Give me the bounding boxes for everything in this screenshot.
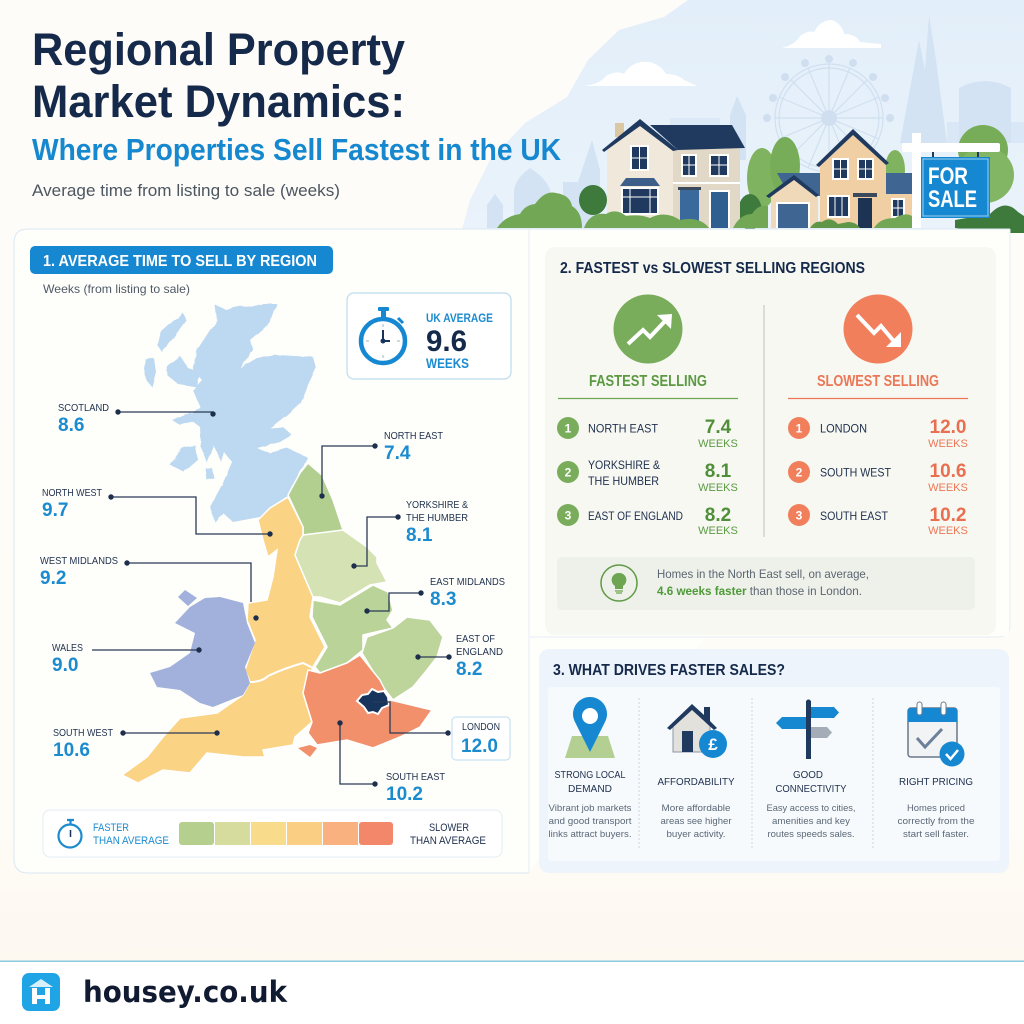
callout: London: 12.0 bbox=[461, 736, 498, 757]
row: South West: SOUTH WEST bbox=[820, 466, 892, 480]
icon: stopwatch bbox=[361, 307, 405, 363]
callout: Yorkshire and the Humber: THE HUMBER bbox=[406, 512, 468, 524]
region: South East bbox=[303, 655, 432, 748]
row: South West bbox=[788, 461, 968, 494]
subtitle: Where Properties Sell Fastest in the UK bbox=[32, 132, 562, 167]
column: fastest selling: FASTEST SELLING bbox=[589, 373, 707, 390]
row: East of England: 3 bbox=[565, 508, 572, 522]
row: Yorkshire and the Humber: WEEKS bbox=[698, 482, 738, 494]
column: slowest selling bbox=[788, 294, 968, 537]
panel 3: what drives faster sales bbox=[539, 649, 1009, 873]
row: East of England: EAST OF ENGLAND bbox=[588, 509, 683, 523]
title: Regional Property bbox=[32, 24, 405, 75]
driver: strong local demand: and good transport bbox=[548, 816, 632, 826]
legend: faster to slower: FASTER bbox=[93, 822, 129, 834]
driver: strong local demand: DEMAND bbox=[568, 783, 612, 795]
UK average box: UK AVERAGE bbox=[426, 311, 493, 325]
callout: Scotland: 8.6 bbox=[58, 415, 84, 436]
icon: rising arrow bbox=[614, 294, 682, 364]
title: Market Dynamics: bbox=[32, 76, 405, 127]
driver: affordability: AFFORDABILITY bbox=[658, 776, 734, 788]
callout: North East vs London: Homes in the North East sell, on average, bbox=[657, 567, 869, 581]
callout: South West: SOUTH WEST bbox=[53, 727, 114, 739]
house: large detached bbox=[602, 119, 745, 228]
row: North East: WEEKS bbox=[698, 438, 738, 450]
callout: Wales bbox=[52, 642, 202, 676]
driver: affordability: buyer activity. bbox=[666, 829, 726, 839]
row: South West: 2 bbox=[796, 466, 803, 480]
row: London: 1 bbox=[796, 422, 803, 436]
callout: London: LONDON bbox=[462, 721, 500, 733]
row: Yorkshire and the Humber: THE HUMBER bbox=[588, 474, 659, 488]
legend: faster to slower: THAN AVERAGE bbox=[93, 835, 169, 847]
callout: West Midlands: WEST MIDLANDS bbox=[40, 555, 118, 567]
icon: small stopwatch bbox=[58, 820, 82, 848]
section heading pill: 1. AVERAGE TIME TO SELL BY REGION bbox=[43, 253, 317, 270]
region: North West, West Midlands and South West bbox=[122, 497, 325, 783]
callout: North East: 7.4 bbox=[384, 443, 411, 464]
for sale sign: SALE bbox=[928, 186, 977, 213]
driver: good connectivity: GOOD bbox=[793, 769, 823, 781]
big wheel bbox=[763, 55, 894, 172]
callout: North West bbox=[42, 487, 273, 537]
row: Yorkshire and the Humber: 2 bbox=[565, 466, 572, 480]
driver: affordability bbox=[658, 704, 734, 839]
driver: right pricing bbox=[898, 702, 974, 839]
callout: Yorkshire and the Humber: YORKSHIRE & bbox=[406, 499, 468, 511]
title bbox=[32, 24, 405, 127]
callout: South West: 10.6 bbox=[53, 740, 90, 761]
callout: Wales: WALES bbox=[52, 642, 83, 654]
hedges and bushes bbox=[497, 192, 1024, 233]
skyline bbox=[487, 15, 1024, 228]
row: North East: 1 bbox=[565, 422, 572, 436]
region: Scotland bbox=[144, 304, 316, 522]
row: London: LONDON bbox=[820, 422, 867, 436]
region: East Midlands bbox=[312, 585, 393, 673]
colour scale bbox=[179, 822, 393, 845]
callout: East of England: EAST OF bbox=[456, 633, 495, 645]
callout: North West: 9.7 bbox=[42, 500, 68, 521]
row: Yorkshire and the Humber bbox=[557, 458, 738, 494]
UK average box: WEEKS bbox=[426, 355, 469, 371]
driver: right pricing: correctly from the bbox=[898, 816, 974, 826]
callout: East of England: 8.2 bbox=[456, 659, 482, 680]
callout: North West: NORTH WEST bbox=[42, 487, 102, 499]
driver: strong local demand: Vibrant job markets bbox=[548, 803, 632, 813]
callout: North East vs London bbox=[557, 557, 975, 610]
column: slowest selling: SLOWEST SELLING bbox=[817, 373, 939, 390]
callout: London bbox=[373, 702, 510, 760]
panel 1: average time by region bbox=[14, 229, 1010, 873]
row: East of England: 8.2 bbox=[705, 505, 731, 526]
callout: South East: 10.2 bbox=[386, 784, 423, 805]
icon: calendar with check bbox=[908, 702, 964, 766]
row: London bbox=[788, 417, 968, 450]
row: East of England bbox=[557, 504, 738, 537]
UK average box bbox=[347, 293, 511, 379]
callout: North East: NORTH EAST bbox=[384, 430, 444, 442]
row: Yorkshire and the Humber: 8.1 bbox=[705, 461, 732, 482]
legend: faster to slower: SLOWER bbox=[429, 822, 469, 834]
callout: Scotland: SCOTLAND bbox=[58, 402, 109, 414]
driver: affordability: areas see higher bbox=[660, 816, 732, 826]
driver: affordability: More affordable bbox=[662, 803, 730, 813]
callout: West Midlands bbox=[40, 555, 259, 621]
for sale sign bbox=[902, 133, 1000, 228]
row: South West: 10.6 bbox=[930, 461, 966, 482]
callout: North East bbox=[319, 430, 444, 499]
driver: right pricing: RIGHT PRICING bbox=[899, 776, 973, 788]
region: East of England bbox=[362, 617, 443, 700]
region: North East bbox=[288, 463, 343, 535]
section heading pill bbox=[30, 246, 333, 274]
cloud left bbox=[584, 62, 697, 86]
cloud right bbox=[782, 20, 881, 48]
callout: Wales: 9.0 bbox=[52, 655, 78, 676]
callout: West Midlands: 9.2 bbox=[40, 568, 66, 589]
callout: South East: SOUTH EAST bbox=[386, 771, 446, 783]
callout: Yorkshire and the Humber: 8.1 bbox=[406, 525, 433, 546]
row: London: WEEKS bbox=[928, 438, 968, 450]
header illustration: houses and skyline bbox=[462, 0, 1024, 233]
house: small with garage bbox=[766, 129, 912, 228]
trees bbox=[579, 125, 1014, 230]
row: South East bbox=[788, 504, 968, 537]
driver: strong local demand bbox=[548, 697, 632, 839]
callout: East of England bbox=[415, 633, 503, 680]
heading: 2. FASTEST vs SLOWEST SELLING REGIONS bbox=[560, 260, 865, 277]
sky backdrop bbox=[462, 0, 1024, 229]
callout: East Midlands: EAST MIDLANDS bbox=[430, 576, 505, 588]
driver: good connectivity: routes speeds sales. bbox=[768, 829, 854, 839]
column: fastest selling bbox=[557, 294, 738, 537]
driver: right pricing: start sell faster. bbox=[903, 829, 969, 839]
callout: Yorkshire and the Humber bbox=[351, 499, 468, 569]
callout: North East vs London: 4.6 weeks faster than those in London. bbox=[657, 584, 862, 598]
panel 2: fastest vs slowest bbox=[530, 229, 1010, 637]
icon: signpost bbox=[776, 700, 839, 759]
caption: Average time from listing to sale (weeks) bbox=[32, 181, 340, 200]
driver: good connectivity: amenities and key bbox=[772, 816, 850, 826]
region: London bbox=[357, 689, 389, 714]
row: East of England: WEEKS bbox=[698, 525, 738, 537]
row: South East: SOUTH EAST bbox=[820, 509, 889, 523]
callout: East Midlands: 8.3 bbox=[430, 589, 456, 610]
divider West Midlands and South West bbox=[250, 663, 313, 682]
callout: South East bbox=[337, 720, 446, 805]
UK map bbox=[122, 304, 443, 783]
driver: good connectivity: CONNECTIVITY bbox=[776, 783, 846, 795]
heading: 3. WHAT DRIVES FASTER SALES? bbox=[553, 662, 785, 679]
axis note: Weeks (from listing to sale) bbox=[43, 282, 190, 296]
icon: map pin bbox=[565, 697, 615, 758]
driver: good connectivity bbox=[766, 700, 856, 839]
UK average box: 9.6 bbox=[426, 325, 467, 358]
callout: Scotland bbox=[58, 402, 216, 436]
logo icon bbox=[22, 973, 60, 1011]
row: Yorkshire and the Humber: YORKSHIRE & bbox=[588, 458, 660, 472]
icon: house with pound: £ bbox=[708, 735, 718, 754]
callout: South West bbox=[53, 727, 220, 761]
region: Isle of Wight bbox=[298, 745, 317, 757]
for sale sign: FOR bbox=[928, 163, 968, 190]
row: South East: 3 bbox=[796, 508, 803, 522]
footer bbox=[0, 960, 1024, 1024]
driver: strong local demand: STRONG LOCAL bbox=[554, 769, 626, 781]
callout: East of England: ENGLAND bbox=[456, 646, 503, 658]
row: South West: WEEKS bbox=[928, 482, 968, 494]
region: Wales bbox=[150, 590, 255, 707]
website name: housey.co.uk bbox=[83, 975, 288, 1009]
driver: good connectivity: Easy access to cities, bbox=[766, 803, 856, 813]
region: Yorkshire and the Humber bbox=[295, 530, 387, 603]
row: North East: NORTH EAST bbox=[588, 422, 659, 436]
callout: East Midlands bbox=[364, 576, 505, 614]
row: South East: 10.2 bbox=[930, 505, 966, 526]
icon: light bulb bbox=[601, 565, 637, 601]
row: London: 12.0 bbox=[930, 417, 966, 438]
legend: faster to slower: THAN AVERAGE bbox=[410, 835, 486, 847]
driver: right pricing: Homes priced bbox=[907, 803, 965, 813]
icon: falling arrow bbox=[844, 294, 912, 364]
driver: strong local demand: links attract buyers. bbox=[548, 829, 632, 839]
row: North East: 7.4 bbox=[705, 417, 732, 438]
row: North East bbox=[557, 417, 738, 450]
row: South East: WEEKS bbox=[928, 525, 968, 537]
legend: faster to slower bbox=[43, 810, 502, 857]
